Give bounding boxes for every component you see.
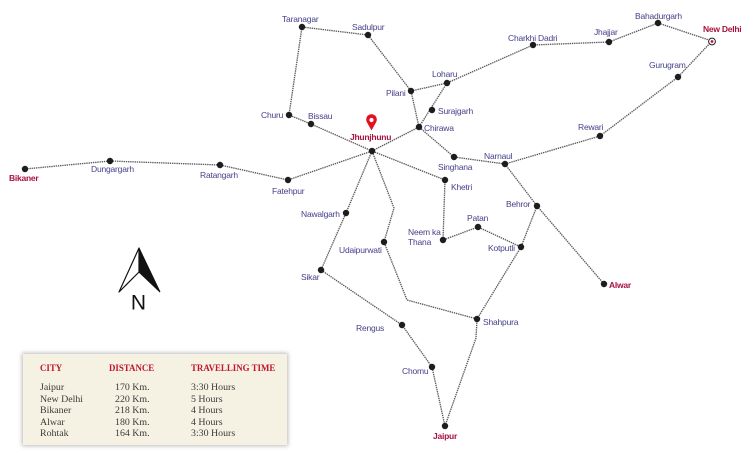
icon: north arrow (119, 248, 160, 314)
city labels: Sadulpur (352, 22, 385, 32)
city labels: Rewari (578, 122, 604, 132)
city markers (22, 20, 681, 429)
city labels: Bissau (308, 111, 333, 121)
city labels: Chirawa (424, 123, 454, 133)
city labels: Shahpura (483, 317, 519, 327)
city labels: Nawalgarh (301, 209, 340, 219)
icon: New Delhi marker (709, 38, 715, 45)
city labels: Jhajjar (594, 27, 618, 37)
table header: CITY (40, 363, 62, 373)
city labels: Sikar (301, 272, 320, 282)
city labels: Narnaul (484, 151, 513, 161)
city labels: Dungargarh (91, 164, 134, 174)
city labels: Surajgarh (438, 106, 474, 116)
city labels: Chomu (402, 366, 429, 376)
city labels: Singhana (438, 162, 473, 172)
city labels: Kotputli (488, 243, 515, 253)
highlighted city labels: Jaipur (433, 431, 458, 441)
distance table (23, 354, 287, 445)
city labels: Behror (506, 199, 531, 209)
city labels: Loharu (432, 69, 458, 79)
city labels: Neem ka (408, 227, 441, 237)
city labels: Khetri (451, 182, 472, 192)
highlighted city labels: Jhunjhunu (350, 132, 391, 142)
table header (40, 363, 275, 373)
city labels: Fatehpur (272, 186, 305, 196)
table header: DISTANCE (109, 363, 154, 373)
icon: Jhunjhunu location pin (366, 114, 377, 130)
city labels: Bahadurgarh (635, 11, 682, 21)
city column: Jaipur New Delhi Bikaner Alwar Rohtak (40, 382, 83, 439)
distance column: 170 Km. 220 Km. 218 Km. 180 Km. 164 Km. (115, 382, 150, 439)
city labels: Thana (408, 237, 432, 247)
city labels: Churu (261, 110, 284, 120)
icon: north arrow: N (131, 292, 146, 314)
city labels: Rengus (356, 323, 384, 333)
highlighted city labels: Bikaner (9, 173, 39, 183)
city labels: Ratangarh (200, 170, 238, 180)
table header: TRAVELLING TIME (191, 363, 275, 373)
highlighted city labels: Alwar (609, 280, 632, 290)
city labels: Taranagar (282, 14, 319, 24)
city labels (91, 11, 686, 376)
highlighted city labels: New Delhi (703, 24, 741, 34)
road network (25, 23, 712, 426)
travelling time column: 3:30 Hours 5 Hours 4 Hours 4 Hours 3:30 Hours (191, 382, 235, 439)
city labels: Gurugram (649, 60, 686, 70)
city labels: Patan (467, 213, 489, 223)
city labels: Udaipurwati (339, 245, 382, 255)
city labels: Charkhi Dadri (508, 33, 558, 43)
city labels: Pilani (386, 88, 406, 98)
